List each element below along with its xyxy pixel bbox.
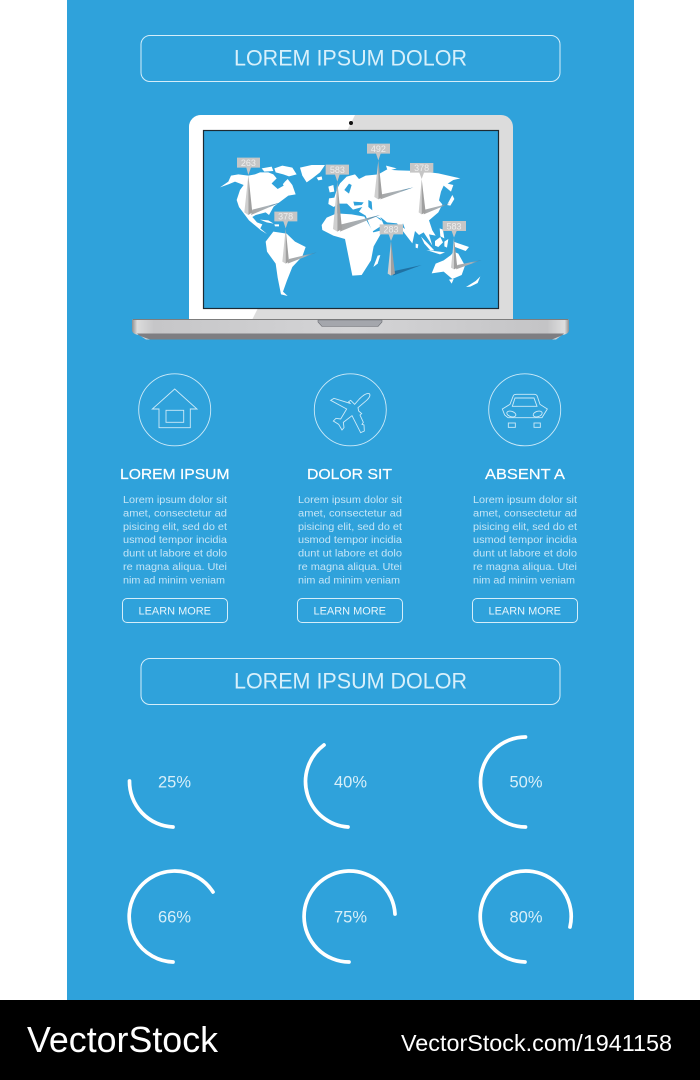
button: learn more: LEARN MORE (488, 606, 561, 618)
body text: amet, consectetur ad (473, 508, 577, 519)
pin 378 south (274, 212, 317, 264)
pin 283: 283 (383, 225, 398, 235)
ring 80%: 80% (510, 908, 543, 926)
body text (123, 495, 227, 586)
pin 378 east: 378 (414, 163, 429, 173)
body text: pisicing elit, sed do et (123, 522, 227, 533)
pin 283 (380, 224, 422, 276)
ring 50%: 50% (510, 774, 543, 792)
ring 50% (481, 737, 543, 827)
ring 40%: 40% (334, 774, 367, 792)
body text: amet, consectetur ad (123, 508, 227, 519)
body text: nim ad minim veniam (298, 575, 400, 586)
ring 80% (480, 871, 571, 962)
body text: dunt ut labore et dolo (123, 549, 227, 560)
pin 583 east: 583 (446, 221, 461, 231)
laptop lid (189, 115, 513, 320)
body text: pisicing elit, sed do et (298, 522, 402, 533)
body text: nim ad minim veniam (473, 575, 575, 586)
pin 263 (237, 158, 280, 215)
body text: usmod tempor incidia (473, 535, 577, 546)
column 2: travel (298, 374, 402, 622)
body text: re magna aliqua. Utei (123, 562, 227, 573)
ring 25%: 25% (158, 774, 191, 792)
body text: amet, consectetur ad (298, 508, 402, 519)
pin 492 (367, 144, 413, 199)
column 1: home (120, 374, 230, 622)
heading box: middle: LOREM IPSUM DOLOR (234, 668, 467, 694)
footer brand: VectorStock (27, 1019, 219, 1060)
body text: re magna aliqua. Utei (473, 562, 577, 573)
pin 583 east (443, 221, 482, 269)
ring 66% (129, 871, 213, 962)
icon: house (139, 374, 211, 446)
world map (220, 144, 482, 296)
column title: LOREM IPSUM (120, 466, 230, 483)
pin 263: 263 (241, 158, 256, 168)
pin 378 south: 378 (278, 212, 293, 222)
pin 492: 492 (371, 144, 386, 154)
body text (473, 495, 577, 586)
laptop with world map (132, 115, 569, 340)
body text: pisicing elit, sed do et (473, 522, 577, 533)
body text: usmod tempor incidia (298, 535, 402, 546)
icon: car (489, 374, 561, 446)
footer bar (0, 1000, 700, 1080)
ring 66%: 66% (158, 908, 191, 926)
pin 583: 583 (330, 165, 345, 175)
map pins (237, 144, 482, 276)
body text (298, 495, 402, 586)
heading box: top (141, 36, 560, 82)
blue background panel (67, 0, 634, 1000)
body text: Lorem ipsum dolor sit (123, 495, 227, 506)
button: learn more: LEARN MORE (314, 606, 386, 618)
icon: airplane (314, 374, 386, 446)
inland seas (272, 180, 405, 229)
progress rings (129, 737, 571, 962)
column 3: car (472, 374, 578, 622)
body text: usmod tempor incidia (123, 535, 227, 546)
button: learn more: LEARN MORE (138, 606, 211, 618)
heading box: middle (141, 658, 560, 704)
body text: dunt ut labore et dolo (473, 549, 577, 560)
body text: dunt ut labore et dolo (298, 549, 402, 560)
button: learn more (298, 598, 402, 622)
ring 40% (306, 745, 367, 827)
button: learn more (472, 598, 578, 622)
ring 25% (129, 774, 191, 827)
body text: Lorem ipsum dolor sit (473, 495, 577, 506)
ring 75%: 75% (334, 908, 367, 926)
heading box: top: LOREM IPSUM DOLOR (234, 46, 467, 70)
laptop screen (204, 130, 498, 308)
pin 583 (326, 165, 380, 232)
ring 75% (304, 871, 395, 962)
column title: DOLOR SIT (307, 466, 392, 483)
body text: Lorem ipsum dolor sit (298, 495, 402, 506)
body text: nim ad minim veniam (123, 575, 225, 586)
pin 378 east (410, 163, 450, 214)
button: learn more (122, 598, 228, 622)
laptop base (132, 320, 569, 340)
footer url: VectorStock.com/1941158 (401, 1030, 672, 1056)
column title: ABSENT A (485, 466, 565, 483)
body text: re magna aliqua. Utei (298, 562, 402, 573)
